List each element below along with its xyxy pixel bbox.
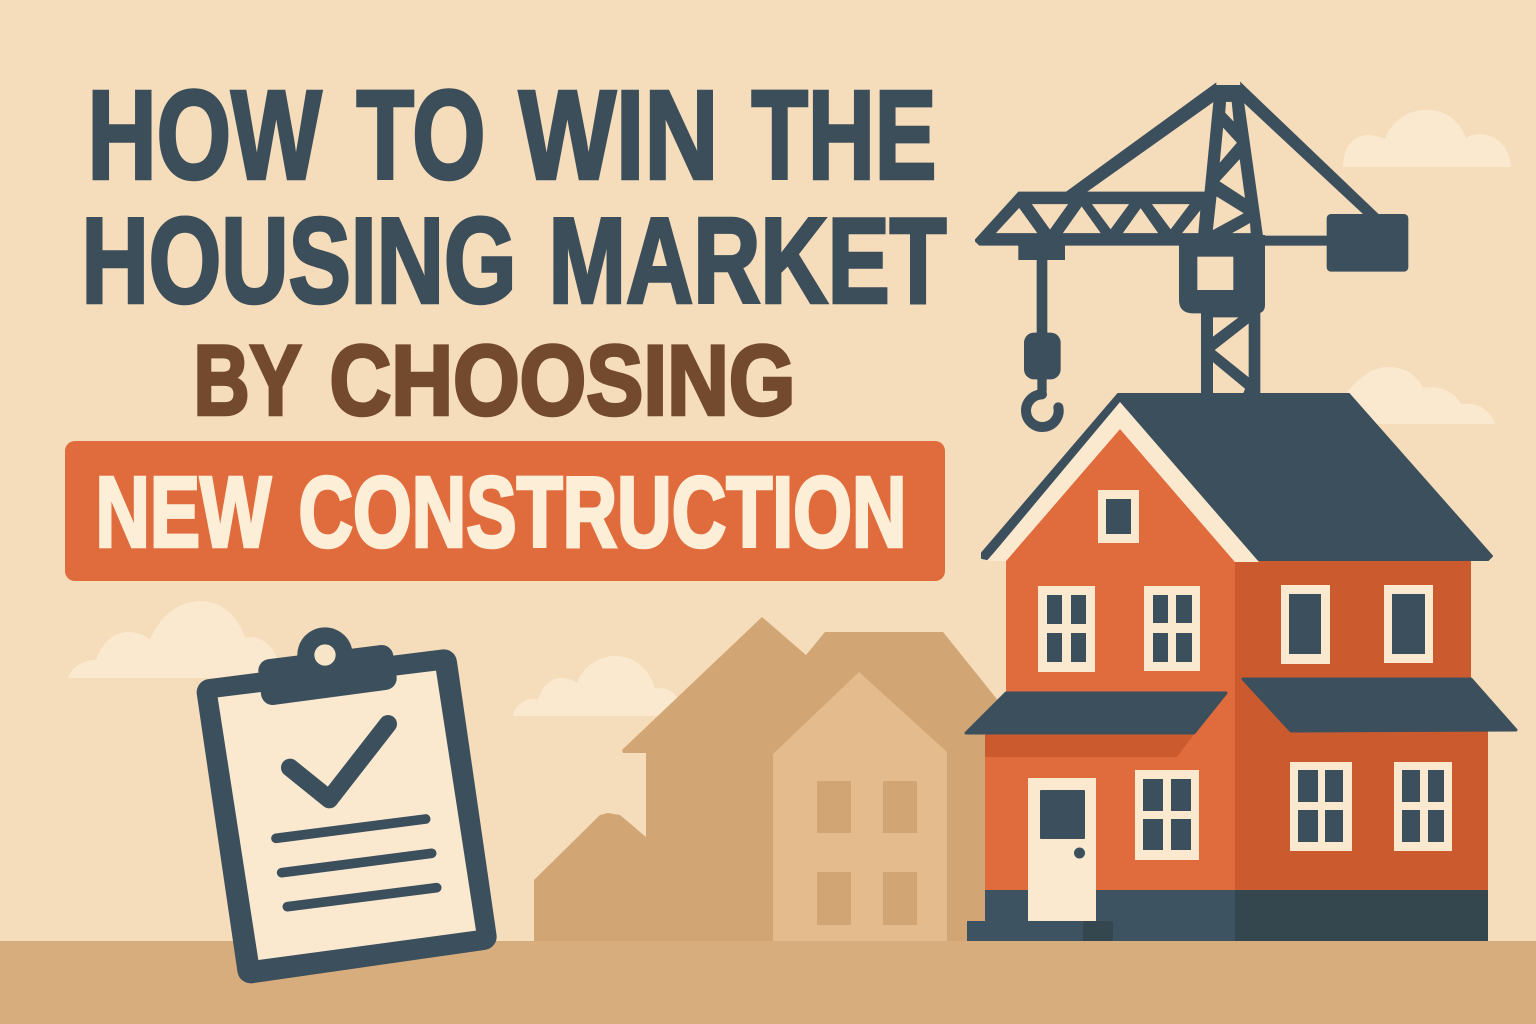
title line 3: BY <box>194 324 302 436</box>
house: upper window 2 <box>1144 586 1200 671</box>
house: attic window <box>1098 490 1139 543</box>
title line 2 <box>82 192 946 328</box>
house: plinth right <box>1235 890 1488 941</box>
house: awning shadow <box>985 734 1194 757</box>
cloud: right behind roof <box>1345 367 1495 424</box>
house: upper window 1 <box>1038 586 1095 672</box>
background house: lighter front <box>773 672 947 941</box>
title line 1 <box>88 64 936 206</box>
title line 1: TO <box>356 64 486 206</box>
crane counterweight <box>1327 214 1408 272</box>
house: upper right window 1 <box>1281 585 1330 664</box>
banner text <box>96 456 906 568</box>
house: door <box>1028 778 1096 921</box>
crane cab <box>1179 235 1265 313</box>
house: gable wall <box>985 429 1235 892</box>
house: right wing wall <box>1235 561 1488 892</box>
title line 1: THE <box>752 64 936 206</box>
house: step shadow <box>1083 921 1113 941</box>
cloud: centre <box>513 656 680 716</box>
crane jib <box>975 192 1330 246</box>
crane hook <box>1018 245 1065 427</box>
cloud: left <box>68 601 280 678</box>
main house <box>966 394 1516 941</box>
background house silhouette <box>534 617 1000 941</box>
house: right awning <box>1243 679 1516 731</box>
house: lower window <box>1135 770 1199 860</box>
crane mast lower <box>1201 312 1260 395</box>
house: lower right window 1 <box>1290 762 1352 851</box>
cloud: top right <box>1343 110 1511 167</box>
ground <box>0 941 1536 1024</box>
title line 1: WIN <box>519 64 718 206</box>
crane mast upper <box>1200 85 1263 238</box>
icon: construction crane <box>975 85 1408 427</box>
house: roof <box>982 394 1492 560</box>
icon: clipboard with checkmark <box>210 627 483 970</box>
title line 3: CHOOSING <box>330 324 796 436</box>
house: gable trim <box>987 402 1259 562</box>
house: upper right window 2 <box>1384 585 1433 663</box>
banner: new construction <box>65 441 945 581</box>
house: plinth left <box>967 890 1235 941</box>
banner text: NEW <box>96 456 271 568</box>
crane cables <box>1068 85 1377 214</box>
title line 3 <box>194 324 796 436</box>
house: lower right window 2 <box>1394 762 1452 851</box>
title line 1: HOW <box>88 64 322 206</box>
banner text: CONSTRUCTION <box>298 456 906 568</box>
title line 2: HOUSING <box>82 192 516 328</box>
title line 2: MARKET <box>548 192 946 328</box>
house: left awning <box>966 693 1226 733</box>
